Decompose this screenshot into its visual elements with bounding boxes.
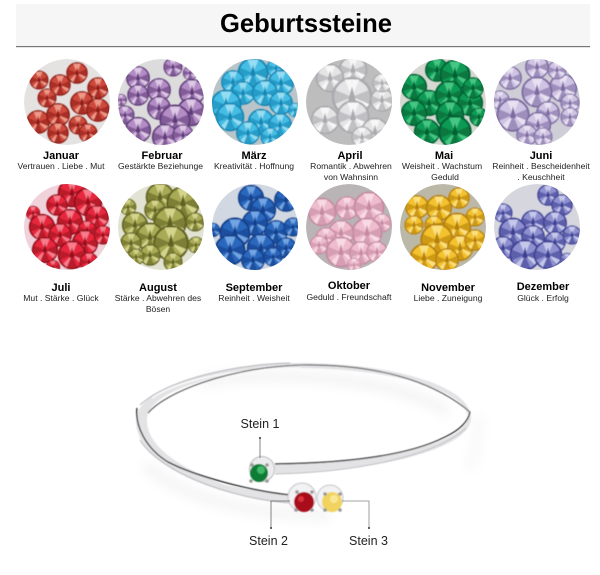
month name: Juni (530, 150, 552, 162)
month name: April (337, 150, 363, 162)
header banner (16, 4, 590, 47)
stone 2 setting: red (288, 483, 316, 512)
meaning: Stärke . Abwehren des (115, 293, 201, 303)
meaning: Kreativität . Hoffnung (214, 161, 294, 171)
gem photo: Mai (400, 59, 488, 148)
gem photo: Februar (115, 58, 204, 149)
panel: November (400, 184, 486, 303)
callout: Stein 1 (241, 417, 280, 458)
meaning: Vertrauen . Liebe . Mut (18, 161, 105, 171)
callout: Stein 3 (342, 501, 388, 548)
month name: Dezember (517, 281, 570, 293)
panel: Oktober (306, 184, 392, 302)
month name: August (139, 282, 177, 294)
panel: September (212, 184, 298, 301)
gem photo: März (211, 58, 302, 146)
gem photo: Oktober (306, 184, 392, 272)
gem photo: Dezember (492, 184, 581, 270)
panel: August (115, 184, 204, 314)
gem photo: August (118, 184, 204, 271)
month name: Mai (435, 150, 453, 162)
gem photo: September (212, 184, 298, 270)
month name: September (226, 282, 283, 294)
panel: Dezember (492, 184, 581, 303)
panel: Februar (118, 59, 204, 170)
callout: Stein 2: Stein 2 (249, 534, 288, 548)
stone 1 setting: green (249, 456, 274, 483)
panel: Juni: . Keuschheit (517, 172, 565, 182)
panel: Juni (491, 56, 590, 182)
month name: November (421, 282, 476, 294)
meaning: Reinheit . Weisheit (218, 293, 290, 303)
month name: Februar (142, 150, 183, 162)
month name: Juli (52, 282, 70, 294)
gem photo: Januar (24, 59, 110, 145)
month name: Januar (43, 150, 80, 162)
month name: März (241, 150, 267, 162)
bangle band (136, 363, 471, 503)
meaning: Gestärkte Beziehungen (118, 161, 208, 171)
panel: April (306, 57, 393, 182)
panel: April: von Wahnsinn (324, 172, 378, 182)
meaning: Weisheit . Wachstum (402, 161, 482, 171)
meaning: Liebe . Zuneigung (414, 293, 483, 303)
gem photo: November (400, 184, 486, 271)
callout: Stein 2 (249, 501, 290, 548)
panel: März (211, 58, 302, 171)
gem photo: Juli (24, 184, 110, 270)
panel: Mai: Geduld (431, 172, 459, 182)
meaning: Geduld . Freundschaft (306, 292, 392, 302)
callout: Stein 1: Stein 1 (241, 417, 280, 431)
panel: Mai (400, 59, 488, 182)
month name: Oktober (328, 280, 371, 292)
meaning: Reinheit . Bescheidenheit (492, 161, 590, 171)
panel: August: Bösen (146, 304, 170, 314)
meaning: Glück . Erfolg (517, 293, 569, 303)
stone 3 setting: yellow (317, 485, 343, 512)
title: Geburtssteine (220, 10, 392, 38)
gem photo: April (306, 57, 393, 147)
meaning: Romantik . Abwehren (310, 161, 392, 171)
gem photo: Juni (491, 56, 580, 146)
meaning: Mut . Stärke . Glück (23, 293, 99, 303)
panel: Januar (18, 59, 110, 171)
callout: Stein 3: Stein 3 (349, 534, 388, 548)
bracelet illustration (136, 363, 478, 515)
panel: Juli (23, 180, 112, 303)
